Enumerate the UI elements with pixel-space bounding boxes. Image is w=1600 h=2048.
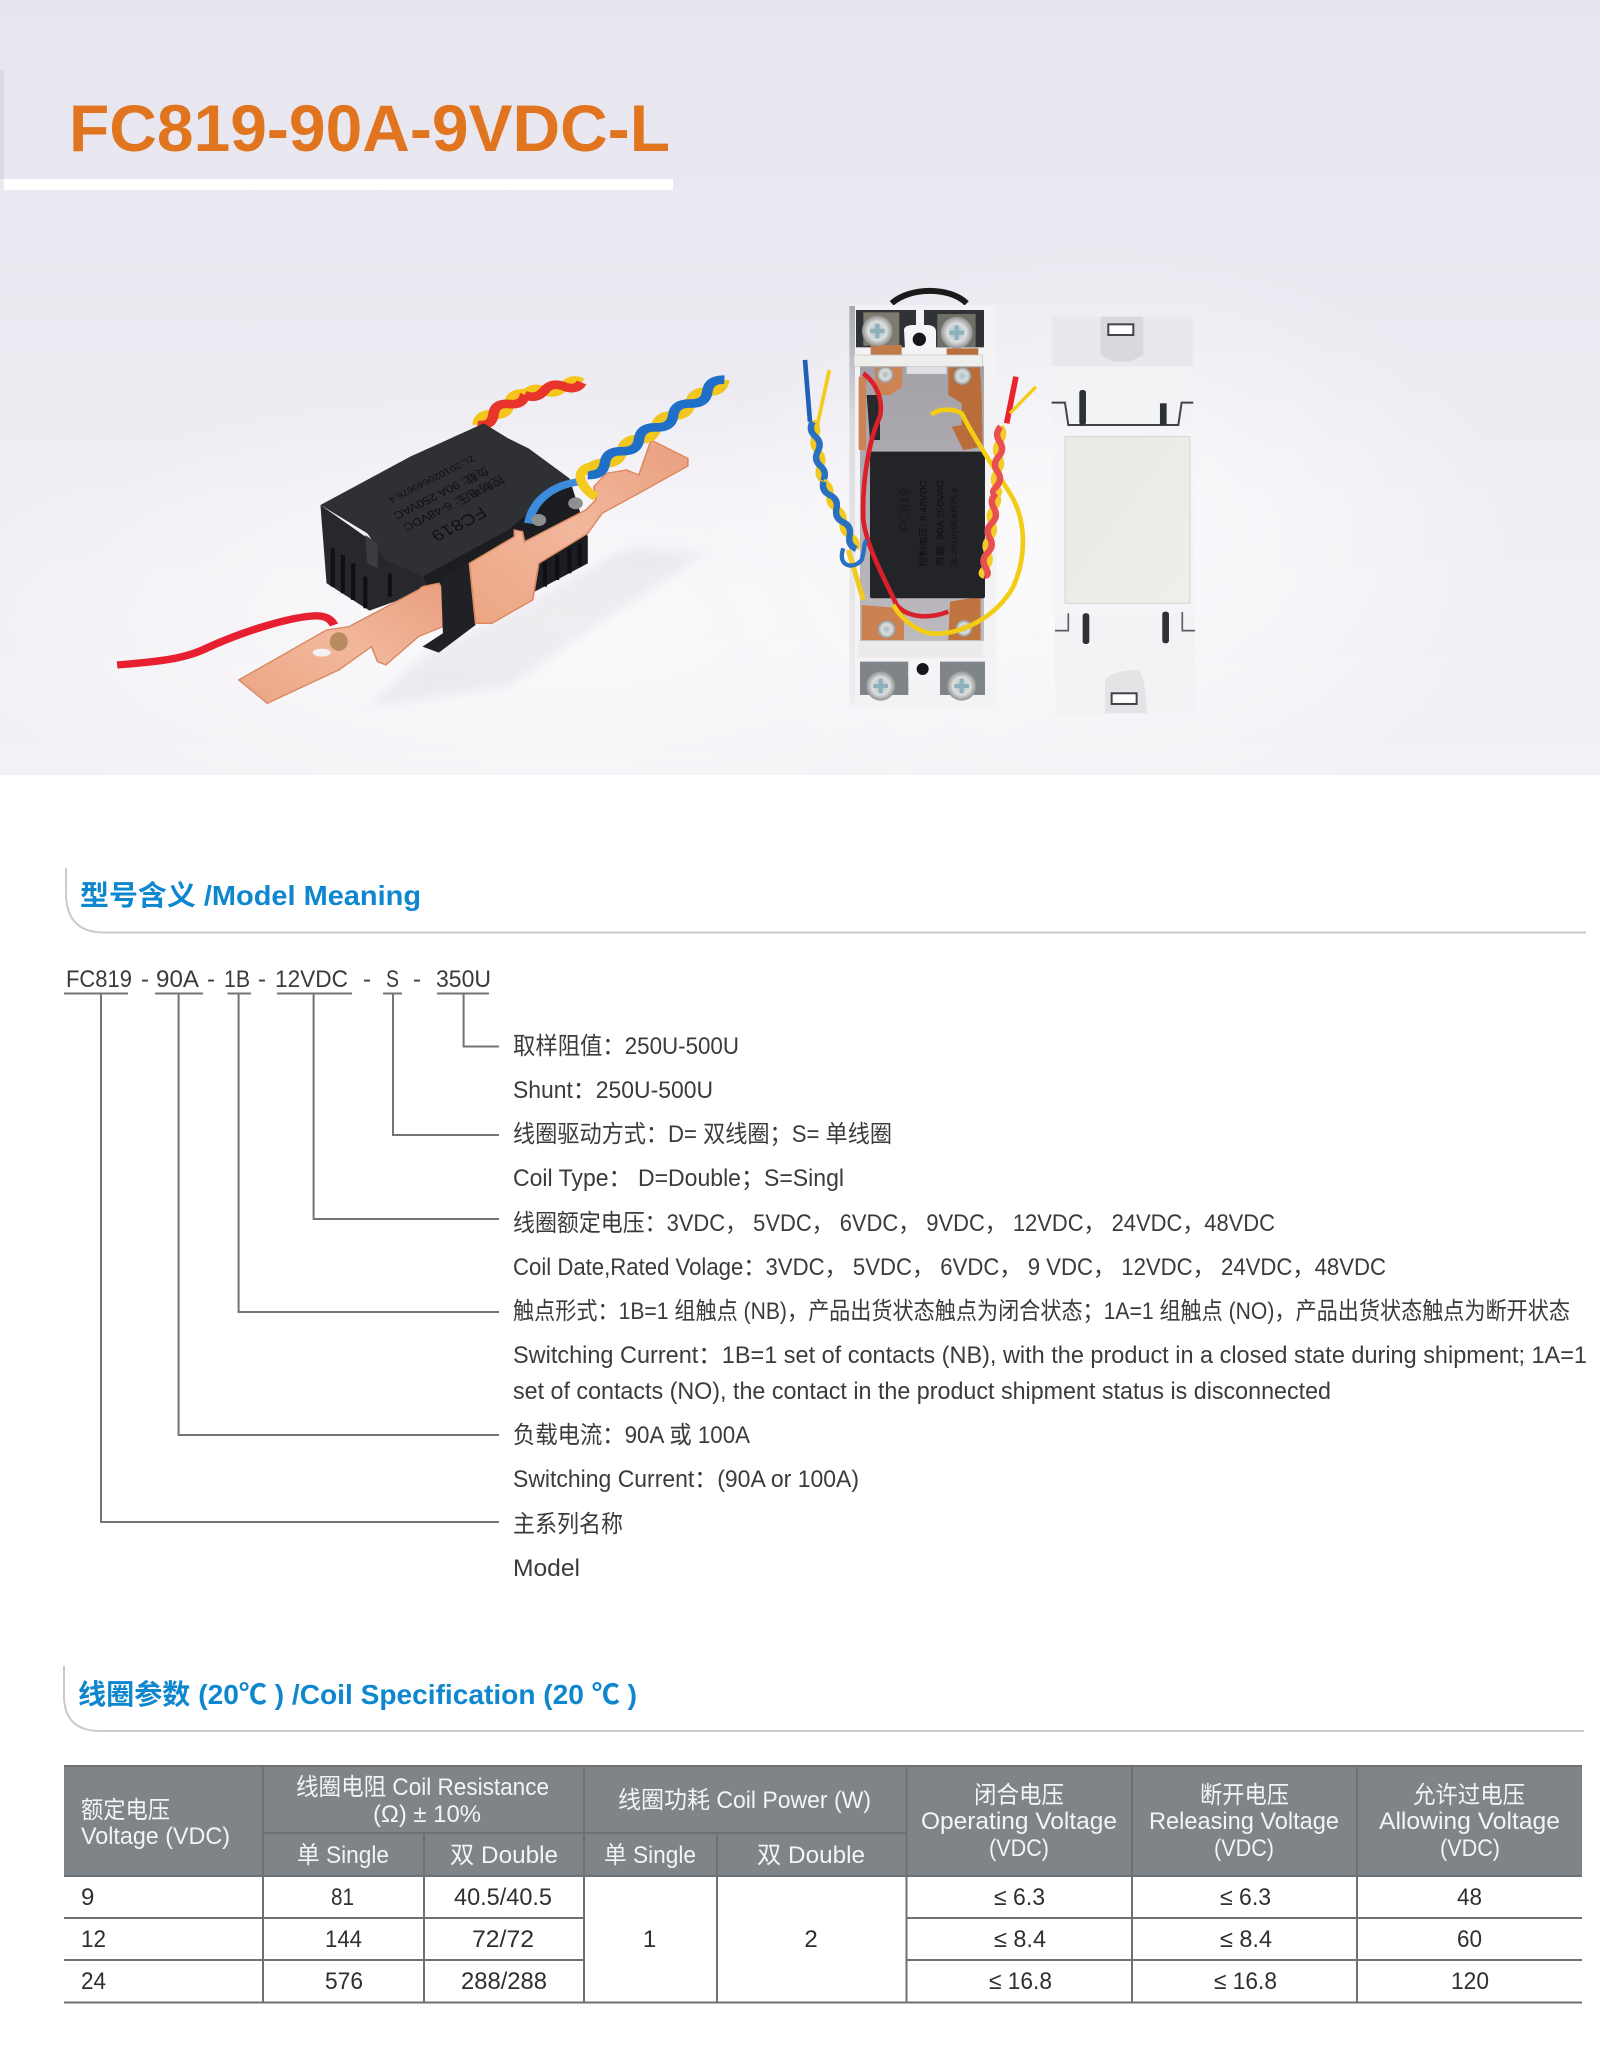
model meaning descriptions: Shunt：250U-500U: [513, 1077, 713, 1104]
model code breakdown: 350U: [436, 966, 491, 993]
table data rows: 24: [81, 1968, 106, 1995]
relay printed markings: FC819: [427, 504, 491, 545]
title underline: [4, 179, 673, 190]
title: FC819-90A-9VDC-L: [69, 91, 670, 165]
table data rows: 576: [325, 1968, 363, 1995]
photo: relay with copper terminals and wires: [117, 376, 728, 707]
model meaning descriptions: Coil Type： D=Double；S=Singl: [513, 1165, 844, 1192]
model meaning descriptions: 负载电流：90A 或 100A: [513, 1422, 750, 1449]
table header: [64, 1766, 1582, 1876]
bottom terminal block: [860, 660, 985, 701]
table header: 双 Double: [450, 1842, 558, 1869]
model meaning descriptions: 取样阻值：250U-500U: [513, 1033, 739, 1060]
table data rows: 9: [81, 1884, 94, 1911]
table header: Operating Voltage: [921, 1808, 1117, 1835]
relay printed markings: [385, 453, 507, 545]
installed relay body: 负载: 90A 250VAC: [934, 480, 945, 567]
relay printed markings: ZL:201020640676.4: [385, 453, 477, 505]
relay body: [320, 423, 588, 611]
model meaning descriptions: set of contacts (NO), the contact in the product shipment status is disconnected: [513, 1378, 1331, 1405]
internal copper terminals: [859, 367, 983, 640]
relay printed markings: 控制电压: 6-48VDC: [400, 473, 507, 534]
model code breakdown: -: [258, 966, 266, 993]
table header: 断开电压: [1200, 1782, 1289, 1809]
table data rows: ≤ 16.8: [1214, 1968, 1277, 1995]
photo: relay installed in open enclosure: [805, 291, 1195, 715]
relay printed markings: 负载: 90A 250VAC: [390, 464, 492, 522]
model code breakdown: 12VDC: [275, 966, 348, 993]
enclosure cover: [1052, 317, 1195, 715]
internal red wire: [863, 373, 948, 616]
relay clip: [422, 563, 476, 653]
table data rows: ≤ 16.8: [989, 1968, 1052, 1995]
terminal hole: [313, 649, 331, 657]
table data rows: 144: [325, 1926, 362, 1953]
model code breakdown: [64, 966, 491, 994]
installed relay body: 控制电压: 6-48VDC: [918, 480, 929, 567]
section heading: coil specification: 线圈参数 (20℃ ) /Coil Specification (20 ℃ ): [78, 1679, 637, 1710]
table header: 单 Single: [297, 1842, 389, 1869]
table header: 闭合电压: [974, 1782, 1064, 1809]
model meaning descriptions: 主系列名称: [513, 1511, 623, 1538]
table data rows: ≤ 6.3: [1220, 1884, 1271, 1911]
lower white bar: [858, 641, 983, 658]
model meaning descriptions: Coil Date,Rated Volage：3VDC， 5VDC， 6VDC， 9 VDC， 12VDC， 24VDC，48VDC: [513, 1254, 1386, 1281]
enclosure base: [849, 305, 997, 707]
model code breakdown: FC819: [66, 966, 132, 993]
installed relay body: FC819: [897, 488, 911, 532]
model code breakdown: 90A: [156, 966, 199, 993]
model code breakdown: -: [141, 966, 149, 993]
table data rows: 40.5/40.5: [454, 1884, 552, 1911]
table data rows: ≤ 8.4: [1220, 1926, 1272, 1953]
interior cavity: [860, 366, 984, 641]
table data rows: 60: [1457, 1926, 1482, 1953]
twisted red and yellow wire: [474, 379, 583, 428]
table data rows: 12: [81, 1926, 106, 1953]
table header: 双 Double: [757, 1842, 865, 1869]
section heading: coil specification: [64, 1666, 1584, 1731]
table header: (VDC): [989, 1835, 1049, 1862]
table data rows: 120: [1451, 1968, 1489, 1995]
leader lines: [101, 994, 499, 1522]
table header: 允许过电压: [1413, 1782, 1525, 1809]
table data rows: 288/288: [461, 1968, 547, 1995]
solder joint: [330, 632, 348, 651]
table data rows: [81, 1884, 1489, 1995]
table data rows: 81: [331, 1884, 354, 1911]
internal screws: [877, 366, 972, 638]
model meaning descriptions: [513, 1033, 1587, 1582]
installed relay body: ZL:201020540576.4: [950, 488, 959, 567]
red lead wire: [117, 616, 334, 665]
model code breakdown: -: [207, 966, 215, 993]
left twisted wire: [805, 360, 867, 600]
model meaning descriptions: 线圈额定电压：3VDC， 5VDC， 6VDC， 9VDC， 12VDC， 24VDC，48VDC: [513, 1210, 1275, 1237]
table header: Releasing Voltage: [1149, 1808, 1339, 1835]
table header: (VDC): [1214, 1835, 1274, 1862]
table header: 单 Single: [604, 1842, 696, 1869]
internal yellow wire: [893, 410, 1023, 634]
model code breakdown: 1B: [224, 966, 250, 993]
table header: 线圈电阻 Coil Resistance: [296, 1774, 549, 1801]
model meaning descriptions: 线圈驱动方式：D= 双线圈；S= 单线圈: [513, 1121, 892, 1148]
table data rows: ≤ 6.3: [994, 1884, 1045, 1911]
table header: 额定电压: [81, 1797, 170, 1824]
section heading: model meaning: [66, 868, 1586, 932]
model code breakdown: -: [413, 966, 421, 993]
coil wires at terminal: [529, 467, 596, 526]
table data rows: 2: [804, 1926, 818, 1953]
table data rows: 1: [643, 1926, 656, 1953]
table data rows: ≤ 8.4: [994, 1926, 1046, 1953]
installed relay body: [870, 452, 985, 598]
table header: Voltage (VDC): [81, 1823, 230, 1850]
coil specification table: [64, 1766, 1582, 2002]
model meaning descriptions: Model: [513, 1555, 580, 1582]
top white bar: [854, 355, 983, 366]
section heading: model meaning: 型号含义 /Model Meaning: [80, 880, 421, 911]
table data rows: 48: [1457, 1884, 1482, 1911]
model code breakdown: -: [363, 966, 371, 993]
right twisted wire: [981, 377, 1036, 576]
model meaning descriptions: Switching Current：(90A or 100A): [513, 1466, 859, 1493]
table data rows: 72/72: [472, 1926, 534, 1953]
cover window: [1065, 437, 1190, 603]
table header: 线圈功耗 Coil Power (W): [618, 1787, 871, 1814]
copper terminal, upper: [469, 440, 688, 623]
table header: Allowing Voltage: [1379, 1808, 1560, 1835]
table header: (Ω) ± 10%: [373, 1801, 481, 1828]
table header: (VDC): [1440, 1835, 1500, 1862]
model meaning descriptions: Switching Current：1B=1 set of contacts (NB), with the product in a closed state during shipment; 1A=1: [513, 1342, 1587, 1369]
model code breakdown: S: [386, 966, 399, 993]
twisted blue and yellow wire: [584, 376, 728, 478]
hero photo panel: [0, 0, 1600, 860]
black arc: [892, 291, 967, 303]
top terminal block: [856, 310, 984, 356]
copper terminal, lower: [239, 583, 445, 703]
